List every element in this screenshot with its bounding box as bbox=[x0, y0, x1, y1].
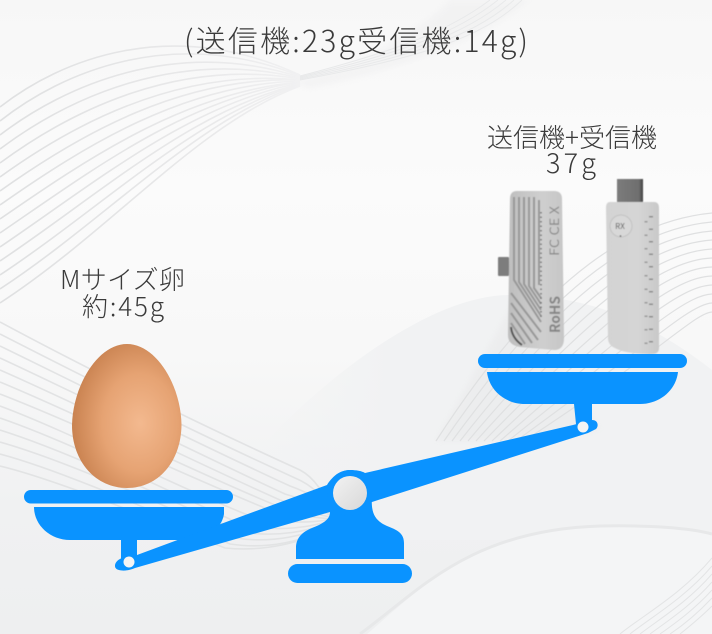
background line swirl: bottom right fan bbox=[620, 558, 712, 634]
left pivot pin bbox=[124, 556, 134, 568]
label: transmitter + receiver weight bbox=[487, 118, 657, 181]
background line swirl: upper right fan bbox=[300, 0, 522, 80]
label: transmitter + receiver weight: 37g bbox=[546, 142, 596, 181]
left hanger bbox=[121, 538, 137, 564]
label: M size egg weight: Mサイズ卵 bbox=[60, 260, 185, 297]
label: M size egg weight bbox=[60, 260, 185, 324]
transmitter markings: RoHS bbox=[545, 296, 565, 333]
transmitter device: FC CE X bbox=[544, 205, 563, 256]
left pan plate bbox=[24, 490, 233, 504]
right pan bowl bbox=[487, 372, 678, 404]
receiver button label: RX bbox=[615, 221, 625, 232]
transmitter ribs bbox=[511, 197, 541, 344]
label: M size egg weight: 約:45g bbox=[82, 287, 164, 324]
title: transmitter and receiver weights: (送信機:23g受信機:14g) bbox=[184, 17, 528, 61]
receiver device bbox=[606, 179, 659, 354]
fulcrum pivot ring bbox=[327, 470, 373, 516]
label: transmitter + receiver weight: 送信機+受信機 bbox=[487, 118, 657, 155]
receiver button bbox=[610, 215, 632, 237]
receiver body bbox=[606, 202, 659, 354]
fulcrum pivot hole bbox=[333, 476, 367, 510]
right pan plate bbox=[478, 354, 687, 368]
transmitter connector bbox=[498, 257, 509, 276]
left pan bowl bbox=[34, 507, 224, 540]
background line swirl: lower left bbox=[0, 322, 330, 549]
transmitter body bbox=[508, 191, 564, 350]
fulcrum foot bbox=[288, 564, 412, 583]
right pivot pin bbox=[578, 422, 588, 432]
fulcrum base bbox=[296, 495, 404, 559]
background line swirl: right arcs bbox=[436, 213, 712, 441]
balance scale bbox=[24, 354, 687, 583]
right hanger bbox=[574, 404, 597, 432]
receiver plug bbox=[617, 179, 643, 204]
transmitter device bbox=[498, 191, 565, 350]
background line swirl: upper left bbox=[0, 46, 300, 303]
egg bbox=[72, 344, 182, 488]
receiver vents bbox=[649, 216, 653, 346]
beam bbox=[115, 420, 598, 571]
